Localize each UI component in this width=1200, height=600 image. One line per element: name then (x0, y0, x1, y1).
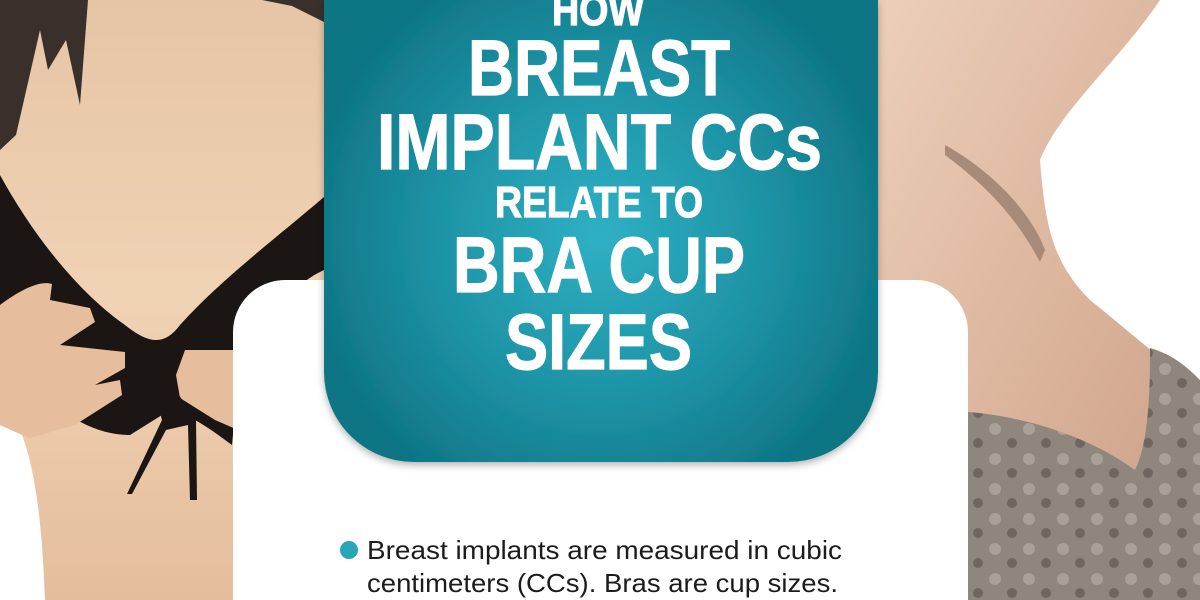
title: RELATE TO (495, 178, 703, 227)
right photo placeholder (878, 0, 1200, 600)
bullet text block (340, 535, 842, 598)
hand right (176, 350, 238, 430)
title: BRA CUP (453, 220, 745, 309)
title: SIZES (505, 297, 692, 386)
bullet text (367, 535, 842, 598)
torso tone (0, 0, 324, 600)
teal title panel (324, 0, 878, 462)
bullet text: centimeters (CCs). Bras are cup sizes. (367, 568, 838, 598)
white card (233, 280, 968, 600)
ribbon (127, 375, 197, 500)
title: BREAST (468, 23, 730, 112)
title (377, 0, 822, 386)
lace garment (968, 348, 1200, 600)
left photo placeholder (0, 0, 324, 600)
icon: bullet dot (340, 541, 358, 559)
hair (0, 0, 88, 150)
hand left (0, 283, 125, 438)
dark garment band (0, 175, 324, 445)
body tone (878, 0, 1200, 600)
title: IMPLANT CCs (377, 97, 822, 186)
shaded contour (945, 145, 1045, 262)
bullet text: Breast implants are measured in cubic (367, 535, 842, 565)
